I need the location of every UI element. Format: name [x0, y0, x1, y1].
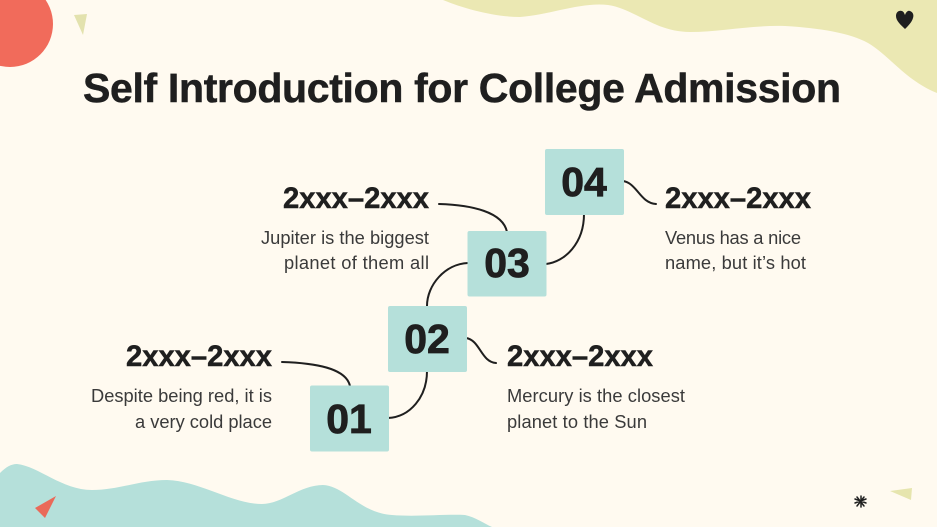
step 02 box [388, 306, 467, 372]
decoration: red circle [0, 0, 53, 67]
blob: teal bottom left [0, 464, 492, 527]
text block: 02: planet to the Sun [507, 411, 647, 432]
connector: 04 label [623, 181, 656, 204]
text block: 01 [91, 341, 273, 432]
connector: 03 label [439, 204, 507, 232]
text block: 03: 2xxx–2xxx [283, 183, 430, 215]
text block: 01: 2xxx–2xxx [126, 341, 273, 373]
text block: 01: a very cold place [135, 411, 272, 432]
title: Self Introduction for College Admission [83, 65, 841, 111]
icon: heart [896, 11, 913, 29]
decoration: red triangle bottom left [35, 496, 56, 518]
decoration: yellow triangle bottom right [890, 488, 912, 500]
text block: 04: 2xxx–2xxx [665, 183, 812, 215]
text block: 02: 2xxx–2xxx [507, 341, 654, 373]
text block: 03 [261, 183, 430, 273]
text block: 04: Venus has a nice [665, 227, 801, 248]
text block: 02 [507, 341, 685, 432]
step 02 box: 02 [404, 316, 450, 362]
step 01 box [310, 386, 389, 452]
icon: star [855, 496, 866, 507]
connector: 02 label [466, 338, 496, 363]
text block: 01: Despite being red, it is [91, 385, 272, 406]
step 03 box: 03 [484, 240, 530, 286]
text block: 03: Jupiter is the biggest [261, 227, 429, 248]
text block: 02: Mercury is the closest [507, 385, 685, 406]
decoration: yellow triangle top left [74, 14, 87, 35]
step 01 box: 01 [326, 396, 372, 442]
step 03 box [468, 231, 546, 296]
step 04 box [545, 149, 624, 215]
text block: 04: name, but it’s hot [665, 252, 806, 273]
connector: 03 to 04 [546, 214, 584, 264]
text block: 03: planet of them all [284, 252, 429, 273]
text block: 04 [665, 183, 812, 273]
step 04 box: 04 [561, 159, 607, 205]
connector: 02 to 03 [427, 263, 468, 306]
connector: 01 label [282, 362, 350, 386]
blob: yellow top right [443, 0, 937, 93]
connectors [282, 181, 656, 418]
connector: 01 to 02 [388, 371, 427, 418]
